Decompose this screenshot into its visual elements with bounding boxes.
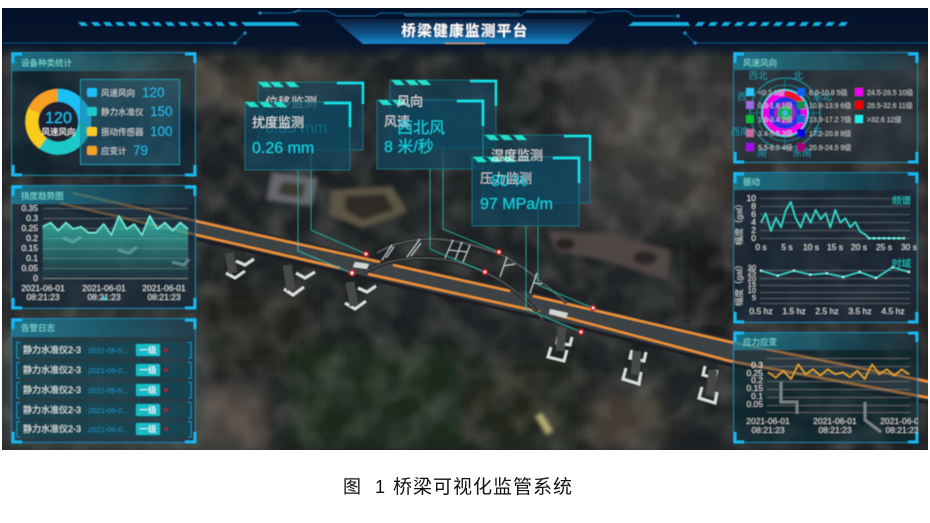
orange deck stripes [60, 193, 930, 398]
frequency spectrum chart: 10 s [803, 242, 819, 252]
alarm row 2: 静力水准仪2-3 [23, 364, 81, 375]
time domain chart: 10 [748, 286, 756, 295]
time domain chart: 4.5 hz [881, 306, 905, 316]
callout: displacement: 位移监测 [265, 95, 317, 110]
wind rose chart: 东南 [792, 147, 812, 159]
wind rose chart: 东北 [812, 91, 832, 103]
alarm row 5 [17, 422, 191, 437]
time domain chart: 时域 [892, 258, 912, 270]
wind speed legend: <0.3 0级 [758, 88, 785, 97]
wind speed legend: 17.2-20.8 8级 [809, 129, 851, 138]
stress line chart: 2021-06-01 [880, 416, 924, 426]
frequency spectrum chart: 8 [751, 201, 756, 211]
frequency spectrum chart: 频谱 [892, 195, 912, 207]
alarm row 2 [17, 362, 191, 378]
stress line chart: 0.15 [746, 383, 763, 393]
wind speed legend: 10.8-13.9 6级 [809, 101, 851, 110]
callout: displacement: 0.35 mm [265, 120, 327, 137]
donut chart [32, 95, 85, 148]
caption: 桥梁可视化监管系统 [393, 476, 573, 498]
deflection line chart: 0.3 [26, 213, 38, 223]
panel: alarm log [12, 318, 196, 442]
alarm row 2: 2021-06-0... [88, 366, 128, 375]
frequency spectrum chart: 0 [751, 233, 756, 243]
chart legend [80, 80, 180, 164]
stress line chart [746, 358, 924, 435]
chart legend: 79 [133, 143, 148, 158]
stress line chart: 08:21:23 [885, 425, 919, 435]
wind speed legend: 28.5-32.6 11级 [867, 101, 913, 110]
wind rose chart: 东 [812, 126, 822, 138]
alarm row 1: 静力水准仪2-3 [23, 344, 81, 355]
frequency spectrum chart: 幅度（gal） [734, 200, 744, 245]
alarm row 5: 静力水准仪2-3 [23, 423, 81, 434]
panel: deflection trend: 挠度趋势图 [21, 191, 64, 201]
deflection line chart: 0.2 [26, 233, 38, 243]
panel: wind rose: 风速风向 [743, 58, 777, 68]
chart legend: 150 [150, 104, 173, 119]
aerial background [2, 50, 928, 455]
frequency spectrum chart: 5 s [781, 242, 793, 252]
caption: 图 [343, 477, 361, 497]
title banner [333, 19, 597, 44]
chart legend: 风速风向 [101, 88, 135, 98]
alarm row 3 [17, 382, 191, 398]
deflection line chart: 0.1 [26, 253, 38, 263]
time domain chart: 幅度（gal） [734, 261, 744, 306]
frequency spectrum chart: 15 s [827, 242, 843, 252]
callout: wind speed: 西北风 [397, 119, 445, 137]
frequency spectrum chart: 30 s [901, 242, 917, 252]
wind rose chart: 南 [757, 147, 767, 159]
frequency spectrum chart: 0 s [755, 242, 767, 252]
deflection line chart: 08:21:23 [147, 292, 181, 302]
donut chart: 120 [45, 110, 72, 127]
leader lines [298, 148, 593, 332]
callout: wind speed [377, 94, 483, 169]
stress line chart: 08:21:23 [751, 425, 785, 435]
callout: wind direction [390, 80, 496, 148]
alarm row 3: 2021-06-0... [88, 386, 128, 395]
time domain chart: 30 [748, 263, 756, 272]
alarm row 4 [17, 402, 191, 418]
wind rose chart [730, 71, 832, 159]
deflection line chart: 0.25 [21, 223, 38, 233]
stress line chart: 0.3 [751, 360, 763, 370]
white deck marks [353, 262, 568, 318]
time domain chart: 2.5 hz [815, 306, 839, 316]
callout: wind speed: 8 米/秒 [384, 138, 434, 156]
callout: pressure: 80 % [491, 173, 527, 190]
bridge piers [63, 237, 717, 403]
wind speed legend: 8.0-10.8 5级 [809, 88, 848, 97]
deflection line chart: 0 [33, 273, 38, 283]
chart legend: 振动传感器 [101, 127, 144, 137]
frequency spectrum chart [734, 193, 917, 252]
sensor markers [350, 250, 595, 334]
alarm row 5: 一级 [139, 424, 157, 434]
bridge [60, 190, 930, 403]
panel: alarm log: 告警日志 [21, 323, 56, 333]
chart legend: 应变计 [101, 146, 127, 156]
panel: vibration [734, 172, 918, 322]
wind speed legend: 5.5-8.0 4级 [758, 143, 793, 152]
wind speed legend: 13.9-17.2 7级 [809, 115, 851, 124]
callout: displacement [258, 82, 363, 150]
time domain chart: 3.5 hz [848, 306, 872, 316]
alarm row 3: 静力水准仪2-3 [23, 384, 81, 395]
wind rose chart: 西 [737, 92, 747, 103]
title banner: 桥梁健康监测平台 [401, 22, 529, 40]
deflection line chart [21, 203, 188, 302]
time domain chart [734, 258, 912, 316]
alarm row 1: 2021-06-0... [88, 346, 128, 355]
alarm row 4: 2021-06-0... [88, 406, 128, 415]
panel: vibration: 振动 [743, 177, 761, 187]
alarm row 1 [17, 342, 191, 358]
panel: stress strain: 应力应变 [743, 337, 778, 347]
chart legend: 100 [150, 124, 173, 139]
alarm row 5: 2021-06-0... [88, 425, 128, 434]
alarm row 3: 一级 [139, 385, 157, 395]
panel: deflection trend [12, 186, 196, 308]
deflection line chart: 2021-06-01 [21, 283, 65, 293]
time domain chart: 0.5 hz [749, 306, 773, 316]
stress line chart: 0.1 [751, 391, 763, 401]
stress line chart: 0.05 [746, 399, 763, 409]
frequency spectrum chart: 2 [751, 225, 756, 235]
callout: deflection: 扰度监测 [252, 115, 304, 130]
deflection line chart: 2021-06-01 [82, 283, 126, 293]
time domain chart: 15 [748, 280, 756, 289]
callout: pressure [472, 148, 579, 226]
frequency spectrum chart: 6 [751, 209, 756, 219]
donut chart: 风速风向 [41, 127, 76, 137]
panel: wind rose [730, 52, 918, 162]
callout: wind speed: 风速 [384, 114, 410, 129]
wind rose chart: 北 [793, 71, 803, 82]
deflection line chart: 2021-06-01 [142, 283, 186, 293]
alarm row 1: 一级 [139, 345, 157, 355]
callout: deflection: 0.26 mm [252, 140, 314, 157]
panel: device type stats [12, 52, 196, 176]
stress line chart: 2021-06-01 [813, 416, 857, 426]
wind speed legend: >32.6 12级 [867, 115, 901, 124]
caption: 1 [375, 477, 385, 497]
callout: wind speed: 风向 [397, 94, 423, 109]
panel: device type stats: 设备种类统计 [21, 58, 73, 68]
top header band [2, 8, 928, 58]
frequency spectrum chart: 10 [747, 193, 756, 203]
deflection line chart: 0.15 [21, 243, 38, 253]
stress line chart: 0.2 [751, 375, 763, 385]
wind speed legend: 3.4-5.5 3级 [758, 129, 793, 138]
frequency spectrum chart: 25 s [876, 242, 892, 252]
wind rose chart: 西北 [748, 71, 768, 82]
wind speed legend: 0.3-1.6 1级 [758, 101, 793, 110]
stress line chart: 2021-06-01 [746, 416, 790, 426]
time domain chart: 1.5 hz [782, 306, 806, 316]
callout: pressure: 压力监测 [480, 171, 532, 186]
time domain chart: 5 [752, 293, 756, 302]
bridge arch [365, 239, 567, 320]
alarm row 4: 静力水准仪2-3 [23, 404, 81, 415]
chart legend: 120 [142, 85, 165, 100]
alarm row 2: 一级 [139, 365, 157, 375]
frequency spectrum chart: 20 s [851, 242, 867, 252]
panel: stress strain [734, 332, 924, 442]
callout: deflection [245, 102, 350, 170]
chart legend: 静力水准仪 [101, 107, 144, 117]
stress line chart: 0.25 [746, 368, 763, 378]
time domain chart: 25 [748, 268, 756, 277]
header decoration [2, 10, 928, 45]
callout: pressure: 湿度监测 [491, 148, 543, 163]
time domain chart: 20 [748, 274, 756, 283]
deflection line chart: 08:21:23 [87, 292, 121, 302]
wind rose chart: 西南 [730, 126, 750, 138]
wind speed legend: 20.8-24.5 9级 [809, 143, 851, 152]
deflection line chart: 08:21:23 [26, 292, 60, 302]
callout: humidity [483, 135, 590, 203]
deflection line chart: 0.05 [21, 263, 38, 273]
wind speed legend: 1.6-3.4 2级 [758, 115, 793, 124]
wind speed legend: 24.5-28.5 10级 [867, 88, 913, 97]
stress line chart: 08:21:23 [818, 425, 852, 435]
deflection line chart: 0.35 [21, 203, 38, 213]
alarm row 4: 一级 [139, 405, 157, 415]
bridge deck [60, 191, 930, 400]
frequency spectrum chart: 4 [751, 217, 756, 227]
wind speed legend [746, 88, 913, 152]
callout: pressure: 97 MPa/m [480, 196, 553, 213]
